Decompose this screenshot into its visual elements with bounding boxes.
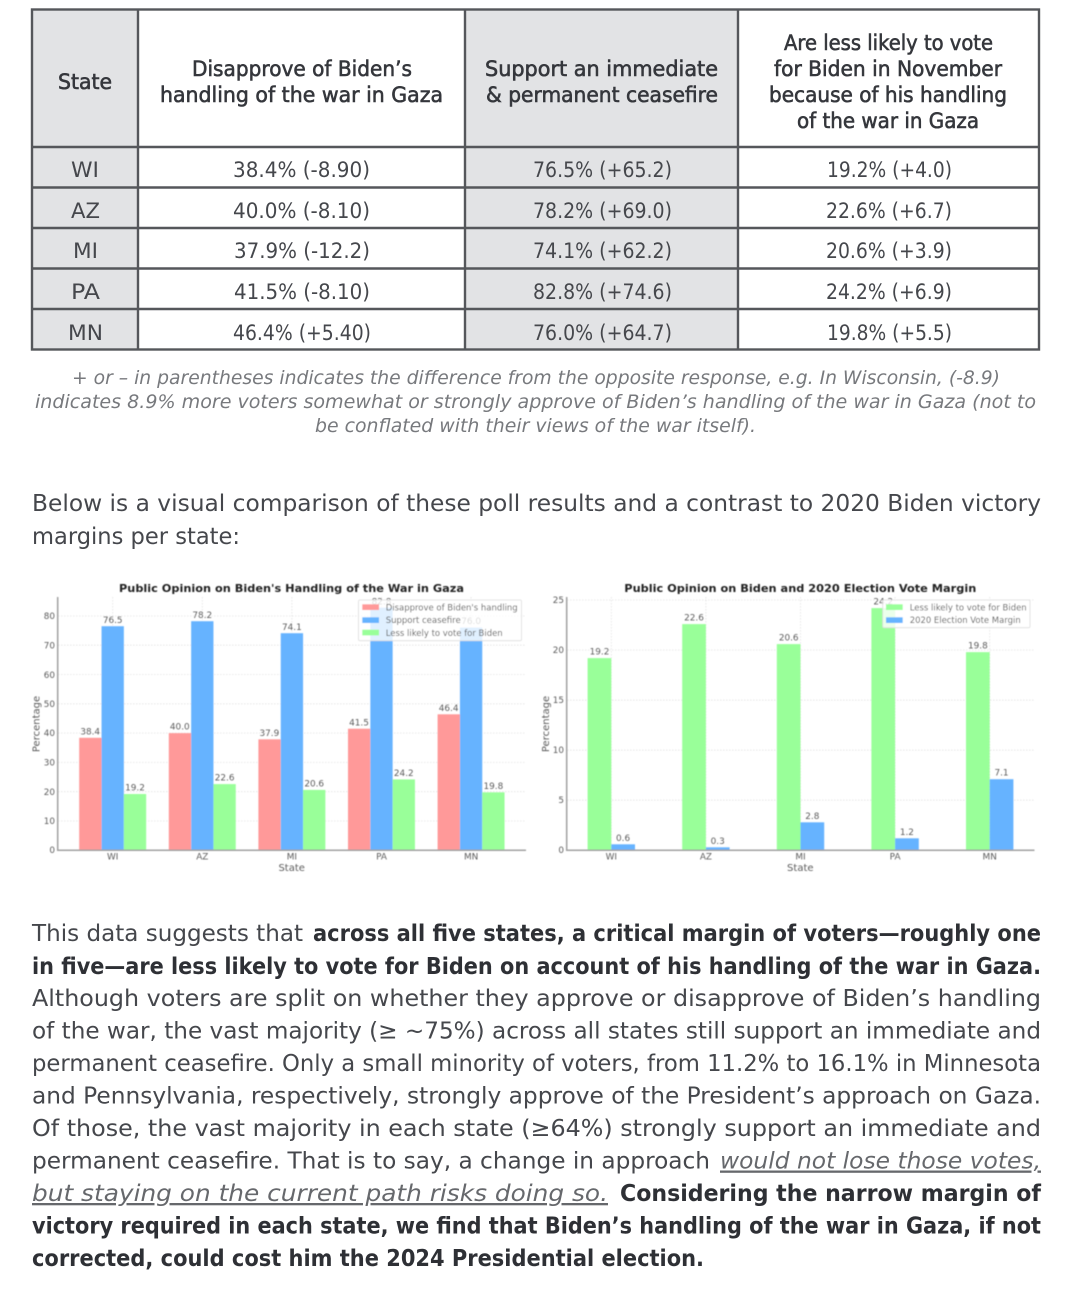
conclusion paragraph: and Pennsylvania, respectively, strongly approve of the President’s approach on Gaza.	[32, 1084, 1041, 1110]
chart legend: Support ceasefire	[386, 616, 461, 626]
table header row: because of his handling	[769, 83, 1007, 107]
y axis labels: 0	[49, 846, 55, 856]
y axis labels: 25	[553, 596, 564, 606]
table header row: Are less likely to vote	[784, 31, 993, 55]
y axis labels: 60	[44, 671, 55, 681]
y axis labels: 40	[44, 729, 55, 739]
bar value labels: 20.6	[304, 780, 324, 790]
table row: MI	[73, 239, 952, 264]
bar chart: public opinion and 2020 election margin	[541, 582, 1034, 874]
table row: MI: 37.9% (-12.2)	[234, 239, 370, 264]
x axis labels: WI	[107, 852, 118, 862]
x axis labels	[606, 852, 997, 874]
bar value labels	[590, 598, 1009, 847]
x axis labels: MN	[464, 852, 478, 862]
bar value labels: 37.9	[260, 729, 280, 739]
table row: AZ: 78.2% (+69.0)	[533, 199, 672, 224]
bar value labels: 7.1	[994, 769, 1009, 779]
table row: PA: 24.2% (+6.9)	[826, 280, 952, 305]
bars: support ceasefire	[102, 608, 482, 850]
table row: PA: 82.8% (+74.6)	[533, 280, 672, 305]
conclusion paragraph: Of those, the vast majority in each state (≥64%) strongly support an immediate and	[32, 1116, 1041, 1142]
bar value labels	[80, 597, 504, 794]
chart legend: Disapprove of Biden's handling	[386, 603, 518, 613]
y axis labels	[32, 612, 55, 856]
table row: PA	[71, 280, 952, 305]
bar value labels: 24.2	[394, 769, 414, 779]
table row: MI: 74.1% (+62.2)	[533, 239, 672, 264]
table row: MN: MN	[68, 321, 103, 346]
table row: AZ: 40.0% (-8.10)	[233, 199, 370, 224]
table row: AZ: 22.6% (+6.7)	[826, 199, 952, 224]
bar value labels: 19.8	[484, 782, 504, 792]
bar value labels: 19.2	[590, 648, 609, 658]
table header row: Support an immediate	[485, 57, 718, 81]
bar value labels: 20.6	[779, 634, 799, 644]
chart legend	[883, 600, 1030, 628]
conclusion paragraph: but staying on the current path risks doing so.	[32, 1181, 608, 1207]
y axis labels: 15	[553, 696, 564, 706]
bars: less likely to vote	[124, 779, 505, 850]
x axis labels: AZ	[700, 852, 712, 862]
table row: WI: 38.4% (-8.90)	[233, 158, 370, 183]
x axis labels: State	[787, 863, 814, 874]
table row: WI: 76.5% (+65.2)	[533, 158, 672, 183]
x axis labels: WI	[606, 852, 617, 862]
table footnote: indicates 8.9% more voters somewhat or strongly approve of Biden’s handling of the war in Gaza (not to	[35, 391, 1036, 413]
bar value labels: 0.6	[616, 834, 631, 844]
bar value labels: 76.0	[461, 617, 481, 627]
bar value labels: 1.2	[900, 828, 914, 838]
table header row: State	[58, 70, 112, 94]
x axis labels: PA	[376, 852, 387, 862]
chart legend: 2020 Election Vote Margin	[910, 616, 1021, 626]
y axis labels: 50	[44, 700, 55, 710]
table row: PA: PA	[71, 280, 100, 305]
bars: less likely to vote	[588, 608, 990, 850]
bar value labels: 0.3	[711, 837, 725, 847]
bar value labels: 19.2	[125, 784, 145, 794]
x axis labels: MI	[287, 852, 297, 862]
y axis labels	[541, 596, 564, 856]
conclusion paragraph	[31, 921, 1042, 1272]
table row: MN: 19.8% (+5.5)	[827, 321, 952, 346]
bar value labels: 22.6	[684, 614, 704, 624]
x axis labels	[107, 852, 478, 874]
bar chart: public opinion on Biden's handling	[32, 582, 526, 874]
poll results table	[32, 9, 1039, 350]
x axis labels: PA	[890, 852, 901, 862]
bar value labels: 74.1	[282, 623, 302, 633]
table header row: of the war in Gaza	[797, 109, 979, 133]
table row: AZ	[71, 199, 952, 224]
y axis labels: 5	[558, 796, 564, 806]
conclusion paragraph: Considering the narrow margin of	[620, 1181, 1042, 1207]
x axis labels: State	[278, 863, 305, 874]
y axis labels: Percentage	[32, 696, 42, 752]
y axis labels: 10	[553, 746, 564, 756]
y axis labels: 30	[44, 758, 55, 768]
table row: MI: MI	[73, 239, 98, 264]
y axis labels: 20	[553, 646, 564, 656]
conclusion paragraph: Although voters are split on whether they approve or disapprove of Biden’s handling	[32, 986, 1041, 1012]
table header row: & permanent ceasefire	[486, 83, 718, 107]
chart title: Public Opinion on Biden and 2020 Election Vote Margin	[624, 582, 976, 595]
bar value labels: 46.4	[439, 704, 459, 714]
conclusion paragraph: This data suggests that	[31, 921, 303, 947]
conclusion paragraph: of the war, the vast majority (≥ ~75%) across all states still support an immediate and	[32, 1018, 1041, 1044]
y axis labels: 10	[44, 817, 55, 827]
conclusion paragraph: corrected, could cost him the 2024 Presidential election.	[32, 1246, 704, 1272]
conclusion paragraph: permanent ceasefire. That is to say, a change in approach	[32, 1148, 710, 1174]
y axis labels: 0	[558, 846, 564, 856]
chart legend: Less likely to vote for Biden	[386, 629, 503, 639]
x axis labels: MI	[795, 852, 806, 862]
bar value labels: 19.8	[968, 642, 988, 652]
bar value labels: 82.8	[372, 597, 392, 607]
table row: PA: 41.5% (-8.10)	[234, 280, 370, 305]
y axis labels: 80	[44, 612, 55, 622]
table footnote	[35, 367, 1036, 437]
y axis labels: 70	[44, 642, 55, 652]
table header row: handling of the war in Gaza	[160, 83, 443, 107]
table header row: for Biden in November	[774, 57, 1002, 81]
intro text to the charts: margins per state:	[32, 524, 240, 550]
conclusion paragraph: permanent ceasefire. Only a small minority of voters, from 11.2% to 16.1% in Minnesota	[32, 1051, 1041, 1077]
bar value labels: 78.2	[192, 611, 212, 621]
y axis labels: Percentage	[541, 696, 552, 752]
x axis labels: AZ	[196, 852, 208, 862]
conclusion paragraph: would not lose those votes,	[720, 1148, 1041, 1174]
table row: WI: WI	[71, 158, 99, 183]
bar value labels: 38.4	[80, 727, 100, 737]
table row: WI: 19.2% (+4.0)	[827, 158, 952, 183]
table row: MI: 20.6% (+3.9)	[826, 239, 952, 264]
intro text to the charts: Below is a visual comparison of these poll results and a contrast to 2020 Biden victory	[32, 491, 1041, 517]
bars: 2020 vote margin	[611, 779, 1013, 850]
bar value labels: 41.5	[349, 718, 369, 728]
chart legend	[358, 600, 522, 641]
intro text to the charts	[32, 491, 1041, 550]
bar value labels: 22.6	[215, 774, 235, 784]
table row: AZ: AZ	[71, 199, 100, 224]
bar value labels: 40.0	[170, 723, 190, 733]
bars: disapprove	[79, 714, 460, 850]
table footnote: + or – in parentheses indicates the difference from the opposite response, e.g. In Wisconsin, (-8.9)	[72, 367, 1000, 389]
table row: WI	[71, 158, 952, 183]
x axis labels: MN	[983, 852, 997, 862]
table row: MN	[68, 321, 952, 346]
bar value labels: 24.2	[873, 598, 893, 608]
chart legend: Less likely to vote for Biden	[910, 603, 1027, 613]
bar value labels: 76.5	[103, 616, 123, 626]
y axis labels: 20	[44, 788, 55, 798]
table row: MN: 46.4% (+5.40)	[233, 321, 371, 346]
chart title: Public Opinion on Biden's Handling of the War in Gaza	[119, 582, 464, 595]
table row: MN: 76.0% (+64.7)	[533, 321, 672, 346]
bar value labels: 2.8	[805, 812, 820, 822]
table header row	[58, 31, 1007, 133]
table header row: Disapprove of Biden’s	[192, 57, 412, 81]
table footnote: be conflated with their views of the war itself).	[315, 415, 756, 437]
